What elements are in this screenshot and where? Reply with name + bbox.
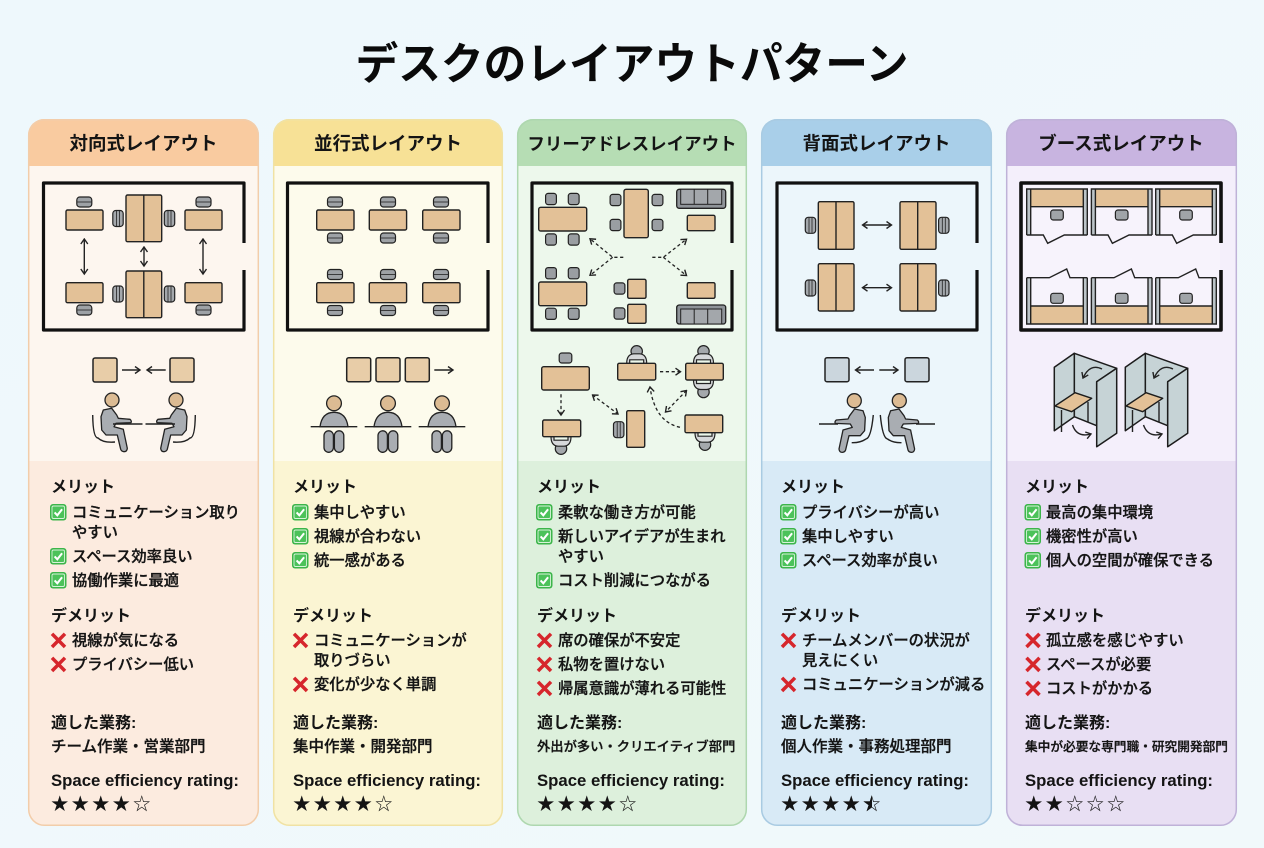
demerits: 孤立感を感じやすい	[1046, 632, 1184, 650]
heading: フリーアドレスレイアウト	[527, 134, 737, 154]
merits: 最高の集中環境	[1046, 504, 1153, 522]
suitable work: 適した業務:	[293, 713, 378, 732]
rating: Space efficiency rating:	[781, 771, 969, 790]
rating: ★★★★☆	[51, 794, 150, 814]
suitable work: 適した業務:	[781, 713, 866, 732]
suitable work: チーム作業・営業部門	[51, 738, 206, 756]
suitable work	[51, 713, 206, 756]
demerits	[781, 606, 985, 694]
suitable work	[781, 713, 952, 756]
rating: Space efficiency rating:	[1025, 771, 1213, 790]
merits: 機密性が高い	[1046, 528, 1138, 546]
merits: メリット	[293, 479, 357, 496]
rating: Space efficiency rating:	[51, 771, 239, 790]
demerits: デメリット	[293, 606, 373, 625]
demerits: コストがかかる	[1046, 680, 1153, 698]
merits	[536, 479, 726, 590]
suitable work: 適した業務:	[537, 713, 622, 732]
panel: ブース式レイアウト	[1006, 119, 1237, 826]
demerits: デメリット	[1025, 606, 1105, 625]
demerits: スペースが必要	[1046, 656, 1151, 674]
panel: 対向式レイアウト	[28, 119, 259, 826]
floor plan	[532, 183, 732, 330]
suitable work	[537, 713, 735, 754]
floor plan	[1021, 183, 1221, 330]
suitable work: 適した業務:	[51, 713, 136, 732]
rating: ★★☆☆☆	[1025, 794, 1124, 814]
rating	[537, 771, 725, 814]
demerits: 取りづらい	[314, 652, 390, 670]
rating: ★★★★☆	[293, 794, 392, 814]
rating	[782, 774, 968, 812]
merits	[780, 479, 939, 570]
panel: 背面式レイアウト	[761, 119, 992, 826]
heading: 背面式レイアウト	[802, 133, 951, 154]
merits: スペース効率が良い	[802, 552, 938, 570]
demerits: コミュニケーションが	[314, 632, 467, 650]
merits: 柔軟な働き方が可能	[558, 504, 696, 522]
back-to-back icon	[819, 358, 935, 452]
demerits	[537, 606, 726, 698]
suitable work: 個人作業・事務処理部門	[781, 738, 952, 756]
suitable work: 外出が多い・クリエイティブ部門	[537, 738, 735, 754]
title: デスクのレイアウトパターン	[356, 40, 908, 89]
merits: スペース効率良い	[72, 548, 193, 566]
rating: ★★★★	[781, 794, 860, 814]
rating: ☆	[863, 794, 880, 814]
merits: 個人の空間が確保できる	[1046, 552, 1214, 570]
rating: ★	[863, 794, 880, 814]
demerits: 私物を置けない	[558, 656, 665, 674]
merits: メリット	[1025, 479, 1089, 496]
demerits: 帰属意識が薄れる可能性	[558, 680, 726, 698]
heading: ブース式レイアウト	[1038, 133, 1204, 154]
suitable work	[293, 713, 433, 756]
panel: 並行式レイアウト	[273, 119, 503, 826]
merits	[50, 479, 240, 590]
demerits: プライバシー低い	[72, 656, 194, 674]
suitable work	[1025, 713, 1228, 754]
merits: プライバシーが高い	[802, 504, 939, 522]
sight line icon	[93, 358, 195, 452]
merits: 集中しやすい	[802, 528, 894, 546]
merits: コスト削減につながる	[558, 572, 711, 590]
demerits: 変化が少なく単調	[314, 676, 436, 694]
suitable work: 適した業務:	[1025, 713, 1110, 732]
demerits: 席の確保が不安定	[558, 632, 680, 650]
merits: 新しいアイデアが生まれ	[558, 528, 726, 546]
merits: やすい	[558, 548, 604, 566]
merits: 統一感がある	[314, 552, 406, 570]
suitable work: 集中が必要な専門職・研究開発部門	[1025, 739, 1228, 754]
heading: 並行式レイアウト	[314, 133, 462, 154]
demerits	[293, 606, 467, 694]
floor plan	[777, 183, 977, 330]
rating	[293, 771, 481, 814]
demerits: チームメンバーの状況が	[802, 632, 970, 650]
rating	[1025, 771, 1213, 814]
suitable work: 集中作業・開発部門	[293, 738, 433, 756]
demerits: 視線が気になる	[72, 632, 179, 650]
demerits: デメリット	[51, 606, 131, 625]
parallel seating icon	[311, 358, 465, 452]
demerits: デメリット	[537, 606, 617, 625]
demerits	[51, 606, 194, 674]
demerits: コミュニケーションが減る	[802, 676, 985, 694]
demerits	[1025, 606, 1184, 698]
merits: メリット	[537, 479, 601, 496]
merits: メリット	[51, 479, 115, 496]
floor plan	[288, 183, 488, 330]
merits: 視線が合わない	[314, 528, 421, 546]
rating: Space efficiency rating:	[293, 771, 481, 790]
rating	[51, 771, 239, 814]
demerits: デメリット	[781, 606, 861, 625]
rating: ★★★★☆	[537, 794, 636, 814]
merits: メリット	[781, 479, 845, 496]
rating: Space efficiency rating:	[537, 771, 725, 790]
booth illustration	[1054, 353, 1188, 447]
merits: コミュニケーション取り	[72, 504, 240, 522]
demerits: 見えにくい	[802, 652, 878, 670]
free address flow icon	[542, 346, 723, 454]
merits	[1024, 479, 1214, 570]
heading: 対向式レイアウト	[69, 133, 218, 154]
merits	[292, 479, 421, 570]
merits: 協働作業に最適	[72, 572, 179, 590]
panel: フリーアドレスレイアウト	[517, 119, 747, 826]
floor plan	[44, 183, 244, 330]
merits: 集中しやすい	[314, 504, 406, 522]
merits: やすい	[72, 524, 118, 542]
